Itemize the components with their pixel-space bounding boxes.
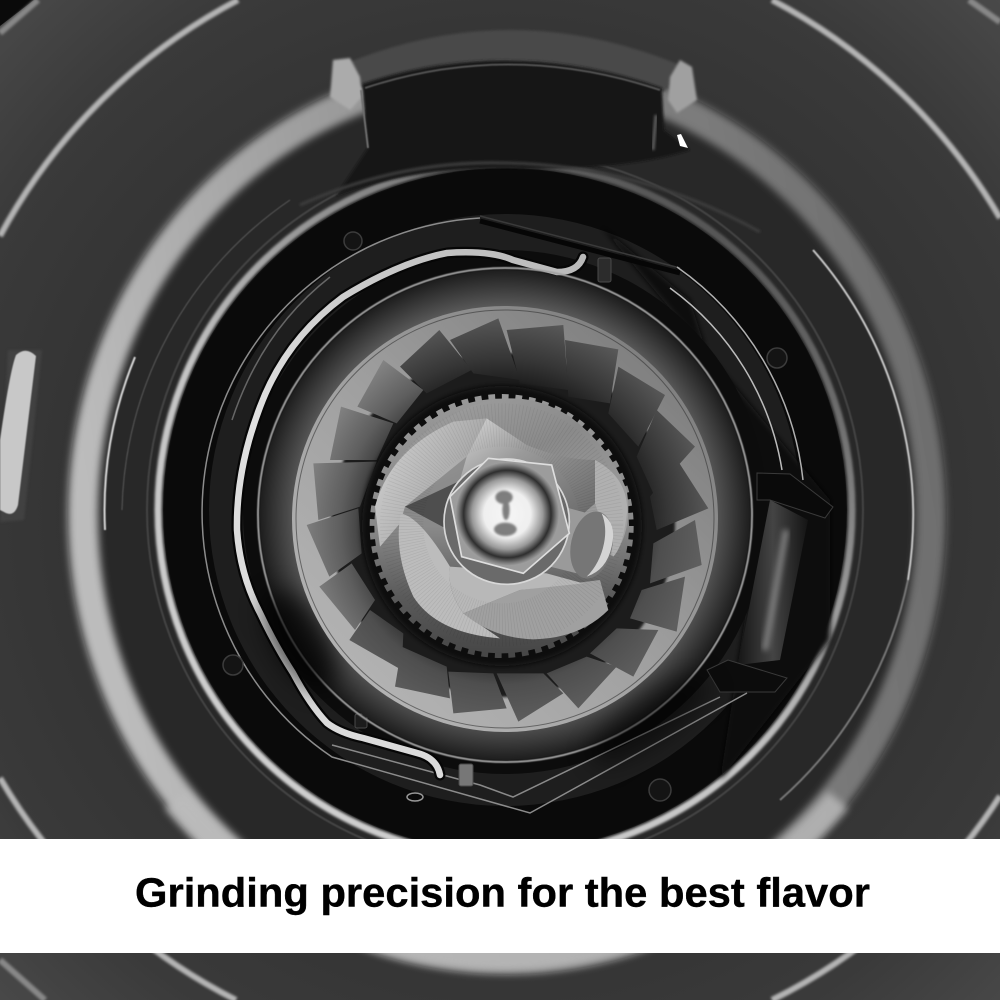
collar ring: [147, 152, 863, 868]
side rubber damper: [707, 473, 833, 692]
dome reflection: [494, 491, 517, 536]
burr teeth: [307, 318, 708, 722]
blade: dark wedge: [405, 480, 462, 532]
blade: upper fan: [375, 398, 628, 557]
small posts: [355, 258, 611, 786]
caption text: Grinding precision for the best flavor: [135, 870, 870, 916]
inner serrated burr: [374, 399, 629, 653]
blade: lower left lobe: [399, 513, 500, 638]
ring around burr plate: [250, 268, 752, 778]
outer burr plate: [292, 306, 718, 732]
dark channel between burrs: [362, 386, 642, 666]
thin inner highlights on body: [105, 200, 913, 800]
blade: lower fan: [463, 580, 608, 639]
blade: radial texture: [402, 425, 602, 625]
dome highlight: [455, 462, 559, 566]
blade: left bright fan: [375, 418, 487, 547]
inner cone blades: [375, 398, 628, 639]
inner ledge band: [209, 214, 830, 806]
caption band: [0, 839, 1000, 953]
screws: [223, 232, 787, 801]
blade: cam lower: [449, 567, 583, 613]
left slot indicator: [0, 350, 42, 522]
top tab of housing: [300, 30, 760, 232]
bolt tab: [550, 507, 619, 583]
blade: right fan edge: [595, 460, 627, 557]
blade: raised cam: [460, 418, 595, 517]
retaining wire clip: [237, 252, 583, 775]
wide bright rim: [83, 71, 931, 959]
inner ledge lines: [202, 216, 803, 813]
hex nut and dome: [444, 458, 569, 584]
